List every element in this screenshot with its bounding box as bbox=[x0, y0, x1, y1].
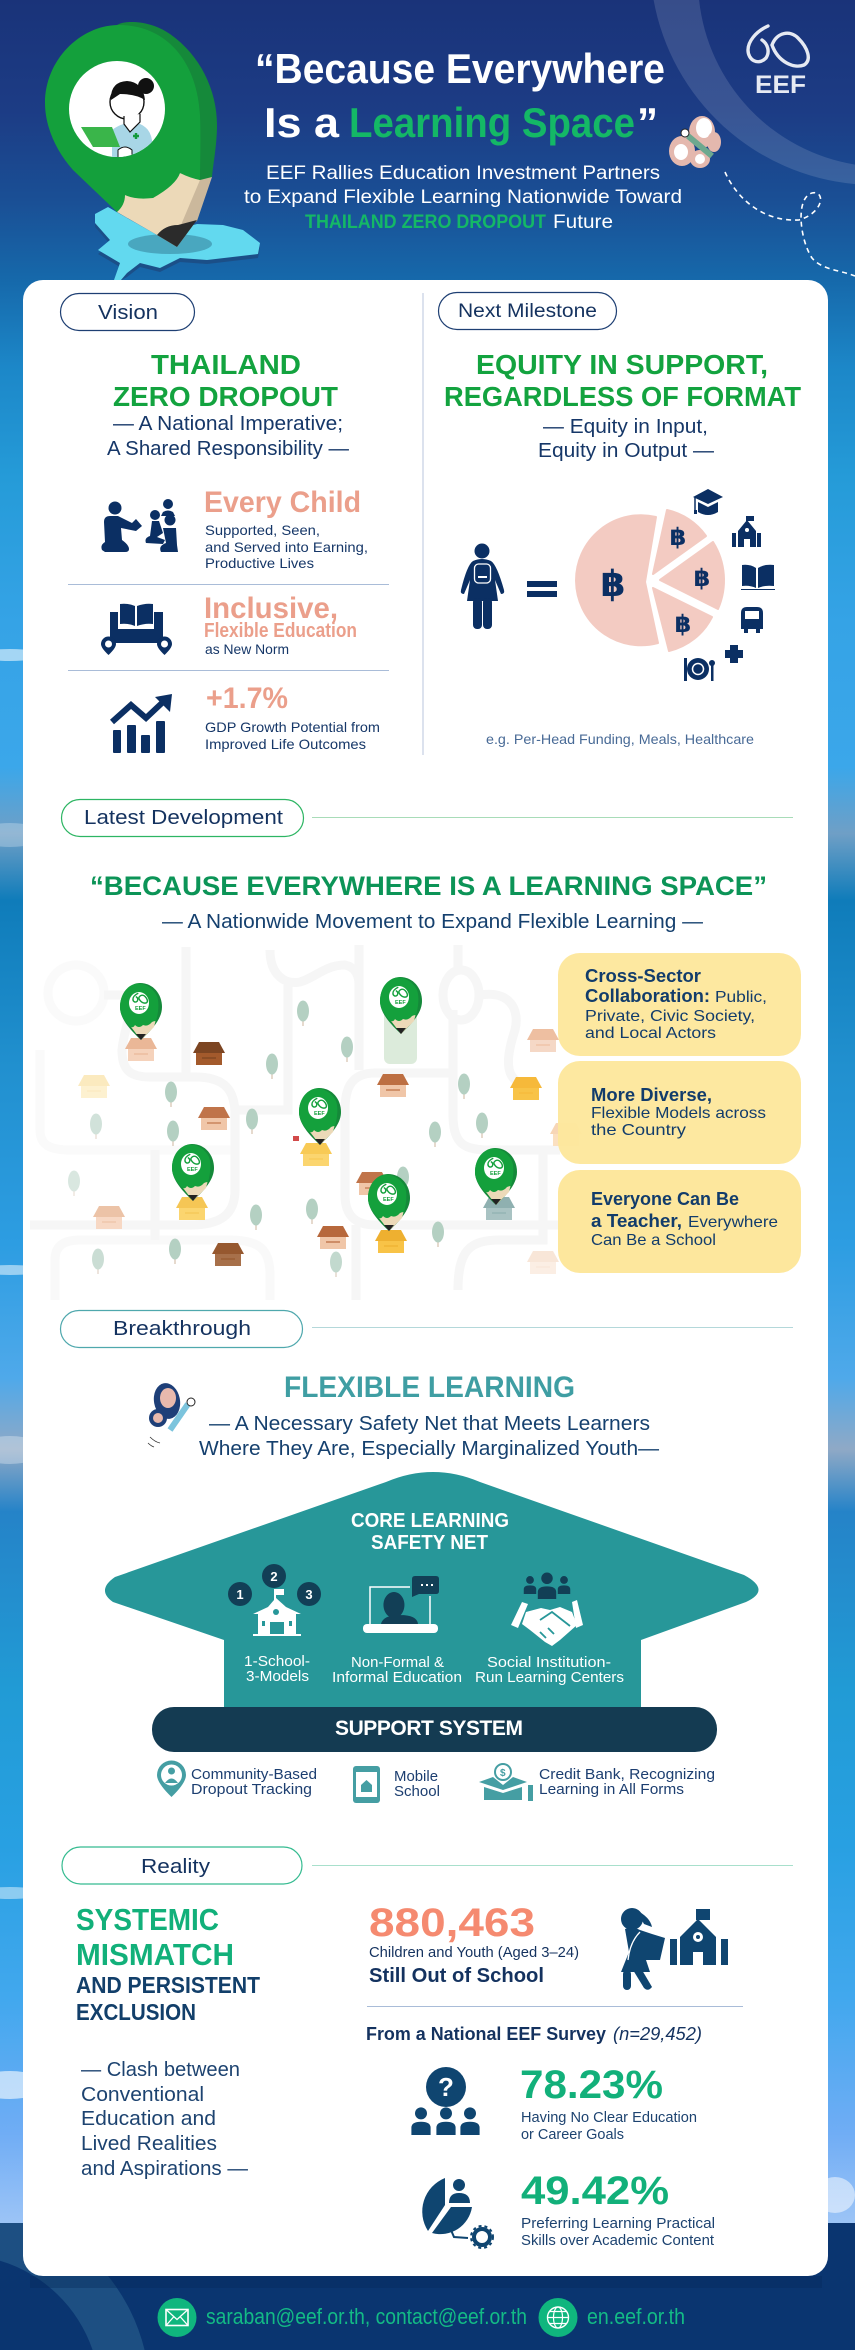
pin: south bbox=[368, 1174, 410, 1231]
soccer field bbox=[384, 1010, 417, 1064]
label: credit bank: Credit Bank, Recognizing bbox=[539, 1766, 715, 1783]
stat: out of school: 880,463 bbox=[369, 1901, 535, 1945]
label: mobile school bbox=[394, 1768, 440, 1800]
icon: pink butterfly with dashed trail bbox=[669, 116, 855, 276]
icon: book sofa with pins bbox=[101, 604, 172, 655]
heading: systemic mismatch: SYSTEMIC bbox=[76, 1902, 219, 1937]
subtitle: Future bbox=[553, 212, 613, 233]
icon: teacher with children bbox=[101, 499, 178, 552]
pie chart: baht allocation: ฿ bbox=[670, 523, 686, 551]
pill: Next Milestone bbox=[438, 292, 616, 330]
text: clash between bbox=[81, 2059, 248, 2180]
icon: pie chart person and gear bbox=[422, 2178, 493, 2248]
text: clash between: — Clash between bbox=[81, 2059, 240, 2081]
title: ” bbox=[637, 99, 658, 146]
title bbox=[255, 45, 665, 146]
text: equity in input bbox=[538, 416, 714, 462]
label: community tracking: Community-Based bbox=[191, 1766, 317, 1783]
pin: north west bbox=[120, 983, 162, 1040]
pie chart: baht allocation: ฿ bbox=[675, 610, 691, 638]
item: every child bbox=[204, 486, 368, 571]
map roads bbox=[30, 945, 560, 1300]
pill: Next Milestone: Next Milestone bbox=[458, 301, 597, 322]
stat: no clear goals: 78.23% bbox=[520, 2063, 663, 2107]
text: safety net description bbox=[199, 1413, 659, 1460]
labels: core learning pathways bbox=[244, 1653, 624, 1686]
item: inclusive flexible education bbox=[204, 592, 357, 657]
section: reality bbox=[62, 1847, 793, 2249]
heading: Thailand Zero Dropout: THAILAND bbox=[151, 349, 301, 380]
illustration: learner with laptop bbox=[81, 78, 154, 158]
item: inclusive flexible education: Flexible Education bbox=[204, 620, 357, 642]
icon: open book bbox=[741, 565, 775, 590]
labels: core learning pathways: Social Institution- bbox=[487, 1654, 611, 1671]
labels: core learning pathways: Informal Education bbox=[332, 1669, 462, 1686]
EEF logo bbox=[748, 26, 808, 99]
icon: credit bank bbox=[479, 1764, 533, 1801]
pill: Reality bbox=[62, 1847, 793, 1884]
icon: question mark and people bbox=[411, 2067, 480, 2135]
heading: national EEF survey: (n=29,452) bbox=[613, 2024, 702, 2044]
labels: core learning pathways: 1-School- bbox=[244, 1653, 310, 1670]
icon: mail bbox=[158, 2298, 196, 2337]
heading: systemic mismatch: EXCLUSION bbox=[76, 1999, 196, 2025]
icon: equals sign bbox=[527, 581, 557, 597]
callout: more diverse: the Country bbox=[591, 1122, 686, 1139]
pin: south: EEF bbox=[383, 1197, 394, 1203]
text: a national imperative: A Shared Responsibility — bbox=[107, 438, 349, 460]
icon: medical cross bbox=[725, 645, 743, 663]
heading: core learning safety net bbox=[351, 1510, 509, 1554]
text: equity in input: — Equity in Input, bbox=[543, 416, 708, 438]
icon: credit bank: $ bbox=[500, 1768, 506, 1779]
text: clash between: Conventional bbox=[81, 2084, 204, 2106]
map trees bbox=[68, 1000, 488, 1277]
subheading: nationwide movement: — A Nationwide Movement to Expand Flexible Learning — bbox=[162, 911, 703, 933]
heading: core learning safety net: CORE LEARNING bbox=[351, 1510, 509, 1532]
bar: support system bbox=[152, 1707, 717, 1752]
pie chart: baht allocation: ฿ bbox=[600, 564, 626, 605]
pill: Reality: Reality bbox=[141, 1856, 210, 1878]
callout: more diverse bbox=[558, 1061, 801, 1164]
item: GDP growth: GDP Growth Potential from bbox=[205, 719, 380, 735]
footer band bbox=[0, 2223, 855, 2350]
subtitle bbox=[244, 163, 682, 233]
icon: Thailand map bbox=[95, 207, 260, 285]
icon: bus bbox=[741, 607, 763, 633]
heading: equity in support: EQUITY IN SUPPORT, bbox=[476, 349, 768, 380]
pill: Vision: Vision bbox=[98, 302, 158, 324]
heading: flexible learning: FLEXIBLE LEARNING bbox=[284, 1371, 575, 1404]
item: GDP growth: +1.7% bbox=[206, 682, 288, 715]
callout: cross-sector collaboration bbox=[558, 953, 801, 1056]
heading: equity in support bbox=[444, 349, 801, 412]
text: clash between: Lived Realities bbox=[81, 2133, 217, 2155]
caption: per-head funding: e.g. Per-Head Funding, Meals, Healthcare bbox=[486, 731, 754, 747]
subtitle: THAILAND ZERO DROPOUT bbox=[305, 212, 546, 233]
stat: practical skills: 49.42% bbox=[521, 2169, 669, 2213]
label: credit bank bbox=[539, 1766, 715, 1798]
text: clash between: and Aspirations — bbox=[81, 2158, 248, 2180]
callout: everyone can be a teacher bbox=[558, 1170, 801, 1273]
house: core learning safety net bbox=[105, 1472, 759, 1712]
pill: Latest Development: Latest Development bbox=[84, 807, 283, 829]
text: email addresses: saraban@eef.or.th, contact@eef.or.th bbox=[206, 2304, 527, 2329]
stat: out of school: Children and Youth (Aged 3–24) bbox=[369, 1944, 579, 1961]
icon: 1-school-3-models: 3 bbox=[305, 1587, 313, 1602]
icon: student bbox=[461, 544, 504, 629]
heading: core learning safety net: SAFETY NET bbox=[371, 1532, 488, 1554]
heading: Thailand Zero Dropout: ZERO DROPOUT bbox=[113, 381, 338, 412]
text: safety net description: Where They Are, Especially Marginalized Youth— bbox=[199, 1438, 659, 1460]
icon: location person bbox=[157, 1760, 186, 1797]
callout: everyone can be a teacher: a Teacher, bbox=[591, 1211, 682, 1231]
icon: girl walking to school bbox=[621, 1908, 728, 1990]
icon: mobile school bbox=[353, 1766, 380, 1803]
title: Is a bbox=[264, 99, 340, 146]
text: a national imperative: — A National Imperative; bbox=[113, 413, 343, 435]
label: mobile school: School bbox=[394, 1783, 440, 1800]
pin: south west bbox=[172, 1144, 214, 1201]
heading: national EEF survey: From a National EEF Survey bbox=[366, 2024, 606, 2044]
icon: plate and cutlery bbox=[684, 658, 715, 681]
section: breakthrough bbox=[60, 1310, 793, 1803]
subtitle: EEF Rallies Education Investment Partners bbox=[266, 163, 660, 184]
label: community tracking: Dropout Tracking bbox=[191, 1781, 312, 1798]
stat: out of school bbox=[369, 1901, 579, 1987]
stat: practical skills: Skills over Academic Content bbox=[521, 2233, 714, 2249]
callout: cross-sector collaboration: Cross-Sector bbox=[585, 966, 701, 986]
callout: cross-sector collaboration: Private, Civic Society, bbox=[585, 1008, 755, 1025]
pin: south west: EEF bbox=[187, 1167, 198, 1173]
pill: Breakthrough bbox=[60, 1310, 793, 1348]
labels: core learning pathways: 3-Models bbox=[246, 1668, 309, 1685]
heading: because everywhere: “BECAUSE EVERYWHERE IS A LEARNING SPACE” bbox=[90, 871, 767, 901]
text: clash between: Education and bbox=[81, 2108, 216, 2130]
text: website: en.eef.or.th bbox=[587, 2304, 685, 2329]
stat: out of school: Still Out of School bbox=[369, 1965, 544, 1987]
header bbox=[45, 22, 855, 285]
panel: vision bbox=[60, 294, 389, 753]
labels: core learning pathways: Non-Formal & bbox=[351, 1654, 444, 1671]
label: community tracking bbox=[191, 1766, 317, 1798]
pie chart: baht allocation: ฿ bbox=[694, 564, 710, 592]
heading: systemic mismatch bbox=[76, 1902, 260, 2025]
callout: more diverse: Flexible Models across bbox=[591, 1105, 766, 1122]
pin: north west: EEF bbox=[135, 1006, 146, 1012]
text: safety net description: — A Necessary Safety Net that Meets Learners bbox=[209, 1413, 650, 1435]
label: credit bank: Learning in All Forms bbox=[539, 1781, 684, 1798]
heading: systemic mismatch: MISMATCH bbox=[76, 1937, 234, 1972]
callout: everyone can be a teacher: Everyone Can Be bbox=[591, 1189, 739, 1209]
stat: no clear goals bbox=[520, 2063, 697, 2143]
stat: practical skills bbox=[521, 2169, 715, 2249]
text: a national imperative bbox=[107, 413, 349, 460]
callout: everyone can be a teacher: Everywhere bbox=[688, 1214, 778, 1231]
stat: no clear goals: or Career Goals bbox=[521, 2127, 624, 2143]
pill: Latest Development bbox=[62, 800, 793, 836]
heading: Thailand Zero Dropout bbox=[113, 349, 338, 412]
footer contacts bbox=[158, 2298, 685, 2337]
item: inclusive flexible education: as New Norm bbox=[205, 641, 289, 657]
icon: community handshake bbox=[511, 1573, 583, 1646]
labels: core learning pathways: Run Learning Centers bbox=[475, 1669, 624, 1686]
icon: pencil location pin bbox=[45, 22, 217, 247]
pill: Breakthrough: Breakthrough bbox=[113, 1318, 251, 1340]
map: villages and pins bbox=[30, 945, 582, 1300]
item: GDP growth: Improved Life Outcomes bbox=[205, 736, 366, 752]
icon: graduation cap bbox=[693, 489, 723, 515]
title: “Because Everywhere bbox=[255, 45, 665, 92]
item: inclusive flexible education: Inclusive, bbox=[204, 592, 338, 625]
icon: globe bbox=[538, 2298, 578, 2337]
icon: question mark and people: ? bbox=[438, 2072, 454, 2102]
EEF logo: EEF bbox=[755, 71, 806, 99]
pin: east bbox=[475, 1148, 517, 1205]
text: equity in input: Equity in Output — bbox=[538, 440, 714, 462]
item: every child: and Served into Earning, bbox=[205, 539, 368, 555]
icon: growth chart bbox=[112, 694, 172, 753]
callout: cross-sector collaboration: Collaboration: bbox=[585, 986, 710, 1006]
pin: north bbox=[380, 977, 422, 1034]
icon: online learner laptop bbox=[363, 1576, 439, 1633]
item: every child: Productive Lives bbox=[205, 555, 314, 571]
item: every child: Every Child bbox=[204, 486, 361, 519]
pill: Vision bbox=[60, 294, 194, 330]
section: latest development bbox=[30, 800, 801, 1300]
icon: 1-school-3-models: 2 bbox=[270, 1569, 278, 1584]
subtitle: to Expand Flexible Learning Nationwide Toward bbox=[244, 187, 682, 208]
icon: blue butterfly bbox=[148, 1381, 195, 1447]
icon: 1-school-3-models: 1 bbox=[236, 1587, 244, 1602]
label: mobile school: Mobile bbox=[394, 1768, 438, 1785]
stat: practical skills: Preferring Learning Practical bbox=[521, 2216, 715, 2232]
item: GDP growth bbox=[205, 682, 380, 752]
stat: no clear goals: Having No Clear Education bbox=[521, 2110, 697, 2126]
item: every child: Supported, Seen, bbox=[205, 522, 320, 538]
panel: next milestone bbox=[438, 292, 801, 747]
heading: systemic mismatch: AND PERSISTENT bbox=[76, 1972, 260, 1998]
bar: support system: SUPPORT SYSTEM bbox=[335, 1717, 523, 1740]
callout: cross-sector collaboration: and Local Actors bbox=[585, 1025, 716, 1042]
pin: centre: EEF bbox=[314, 1111, 325, 1117]
icon: 1-school-3-models bbox=[228, 1564, 321, 1636]
callout: more diverse: More Diverse, bbox=[591, 1085, 712, 1105]
pin: north: EEF bbox=[395, 1000, 406, 1006]
pie chart: baht allocation bbox=[576, 510, 724, 651]
icon: school bbox=[732, 516, 761, 547]
title: Learning Space bbox=[349, 99, 635, 146]
white content card bbox=[23, 280, 828, 2276]
pin: centre bbox=[299, 1088, 341, 1145]
pin: east: EEF bbox=[490, 1171, 501, 1177]
callout: everyone can be a teacher: Can Be a School bbox=[591, 1232, 716, 1249]
callout: cross-sector collaboration: Public, bbox=[715, 989, 767, 1006]
heading: equity in support: REGARDLESS OF FORMAT bbox=[444, 381, 801, 412]
map houses bbox=[78, 1029, 582, 1274]
